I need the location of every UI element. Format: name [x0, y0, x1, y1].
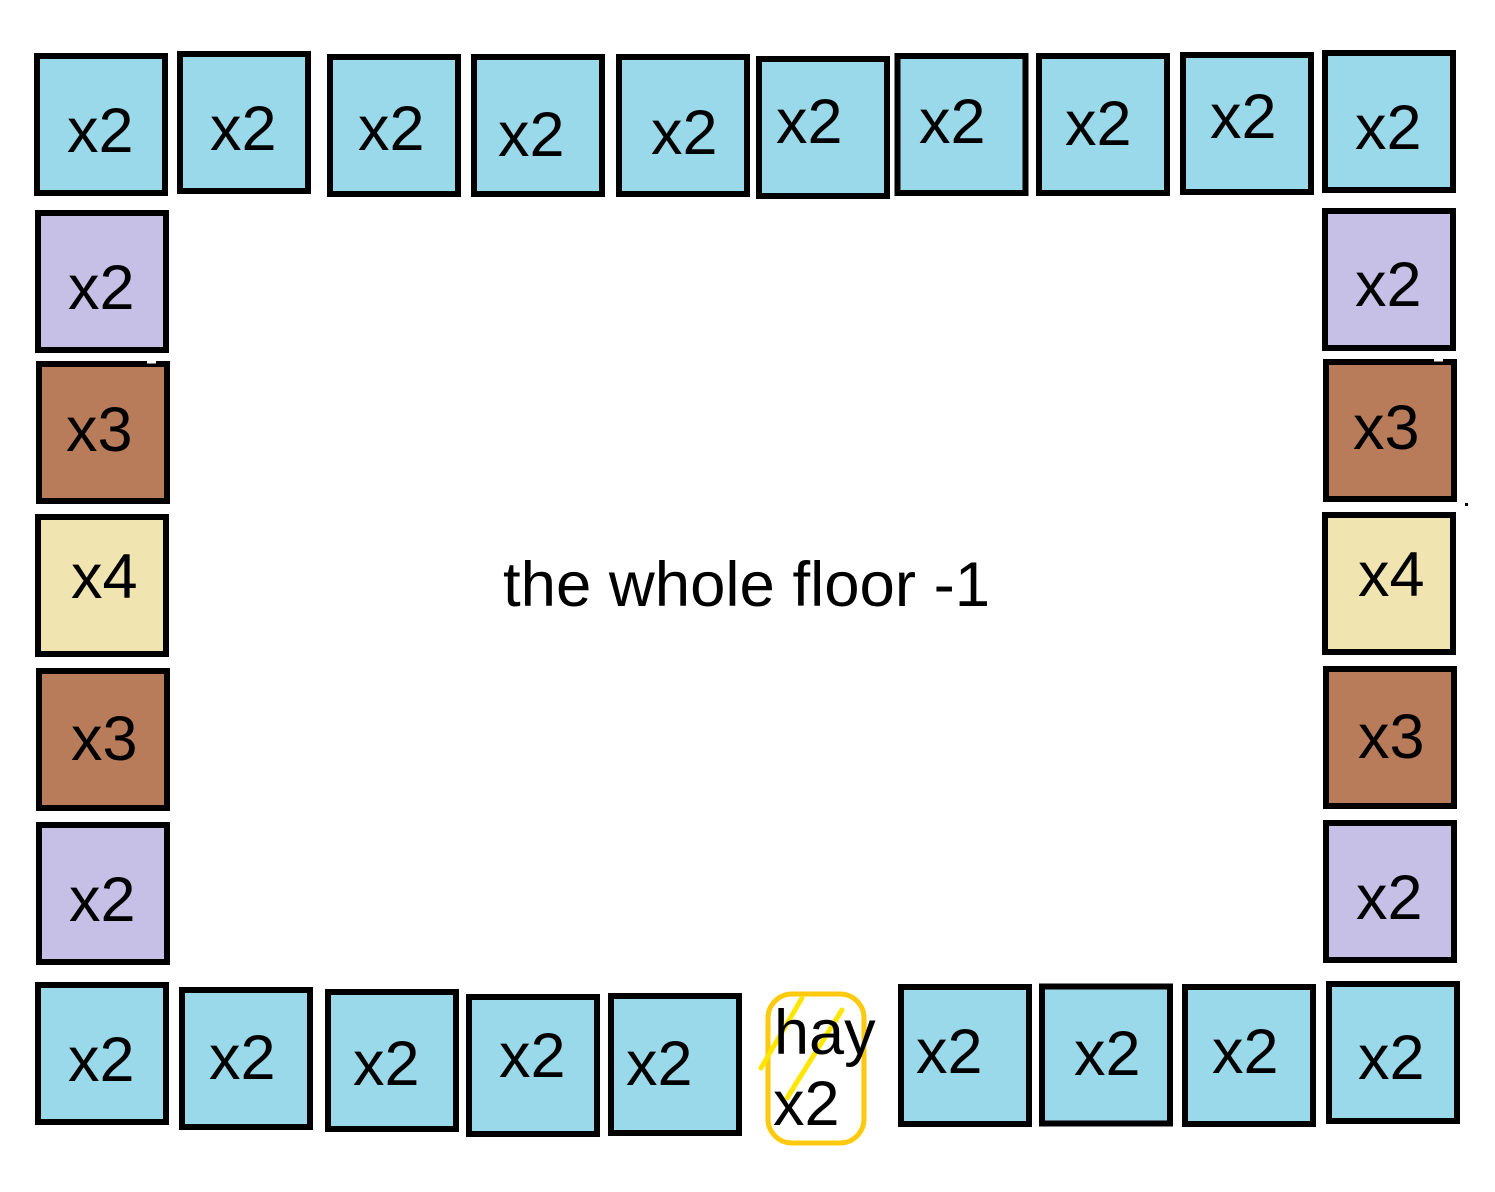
top row tile 3	[330, 57, 458, 194]
crossed-out hay tile: hay	[774, 998, 876, 1068]
center label: the whole floor -1	[503, 550, 990, 620]
right column purple tile	[1325, 211, 1453, 348]
right column purple tile 2	[1326, 823, 1454, 960]
bottom row tile 2	[182, 990, 310, 1127]
right column brown tile 2	[1326, 669, 1454, 806]
bottom row tile 4: x2	[499, 1021, 566, 1091]
bottom row tile 9	[1185, 987, 1313, 1124]
left column brown tile: x3	[66, 395, 133, 465]
bottom row tile 1	[38, 985, 166, 1122]
left column brown tile	[39, 364, 167, 501]
right column brown tile: x3	[1353, 393, 1420, 463]
crossed-out hay tile	[761, 994, 876, 1143]
right column yellow tile	[1325, 515, 1453, 652]
left column purple tile 2: x2	[69, 865, 136, 935]
top row tile 1: x2	[67, 96, 134, 166]
left column purple tile 2	[39, 825, 167, 962]
right column purple tile 2: x2	[1356, 863, 1423, 933]
top row tile 7	[898, 56, 1026, 193]
bottom row tile 3: x2	[353, 1029, 420, 1099]
top row tile 10	[1325, 53, 1453, 190]
top row tile 4: x2	[498, 100, 565, 170]
top row tile 6: x2	[776, 87, 843, 157]
bottom row tile 10	[1329, 984, 1457, 1121]
top row tile 5	[619, 57, 747, 194]
left column brown tile 2: x3	[71, 704, 138, 774]
top row tile 2	[180, 54, 308, 191]
left column brown tile 2	[39, 671, 167, 808]
top row tile 8: x2	[1065, 89, 1132, 159]
bottom row tile 7	[901, 987, 1029, 1124]
left column yellow tile: x4	[71, 542, 138, 612]
bottom row tile 4	[469, 997, 597, 1134]
crossed-out hay tile: x2	[773, 1069, 840, 1139]
left column purple tile	[38, 213, 166, 350]
right column brown tile	[1326, 362, 1454, 499]
top row tile 7: x2	[919, 87, 986, 157]
left column purple tile: x2	[68, 253, 135, 323]
bottom row tile 2: x2	[209, 1023, 276, 1093]
bottom row tile 1: x2	[68, 1025, 135, 1095]
top row tile 9: x2	[1210, 82, 1277, 152]
right column purple tile: x2	[1355, 250, 1422, 320]
stray dot	[1465, 503, 1468, 506]
top row tile 9	[1183, 55, 1311, 192]
top row tile 3: x2	[358, 94, 425, 164]
top row tile 6	[759, 59, 887, 196]
bottom row tile 8: x2	[1074, 1019, 1141, 1089]
bottom row tile 7: x2	[916, 1017, 983, 1087]
bottom row tile 8	[1042, 986, 1170, 1124]
top row tile 5: x2	[651, 98, 718, 168]
top row tile 2: x2	[210, 94, 277, 164]
top row tile 4	[474, 57, 602, 194]
right column yellow tile: x4	[1358, 540, 1425, 610]
right column brown tile 2: x3	[1358, 702, 1425, 772]
bottom row tile 10: x2	[1358, 1023, 1425, 1093]
left column yellow tile	[38, 517, 166, 654]
bottom row tile 5: x2	[626, 1029, 693, 1099]
top row tile 8	[1039, 56, 1167, 193]
small white notch on right brown tile	[1434, 359, 1443, 362]
bottom row tile 9: x2	[1212, 1017, 1279, 1087]
bottom row tile 3	[328, 992, 456, 1129]
top row tile 1	[37, 56, 165, 193]
small white notch on left brown tile	[147, 361, 156, 364]
top row tile 10: x2	[1355, 93, 1422, 163]
bottom row tile 5	[611, 996, 739, 1133]
